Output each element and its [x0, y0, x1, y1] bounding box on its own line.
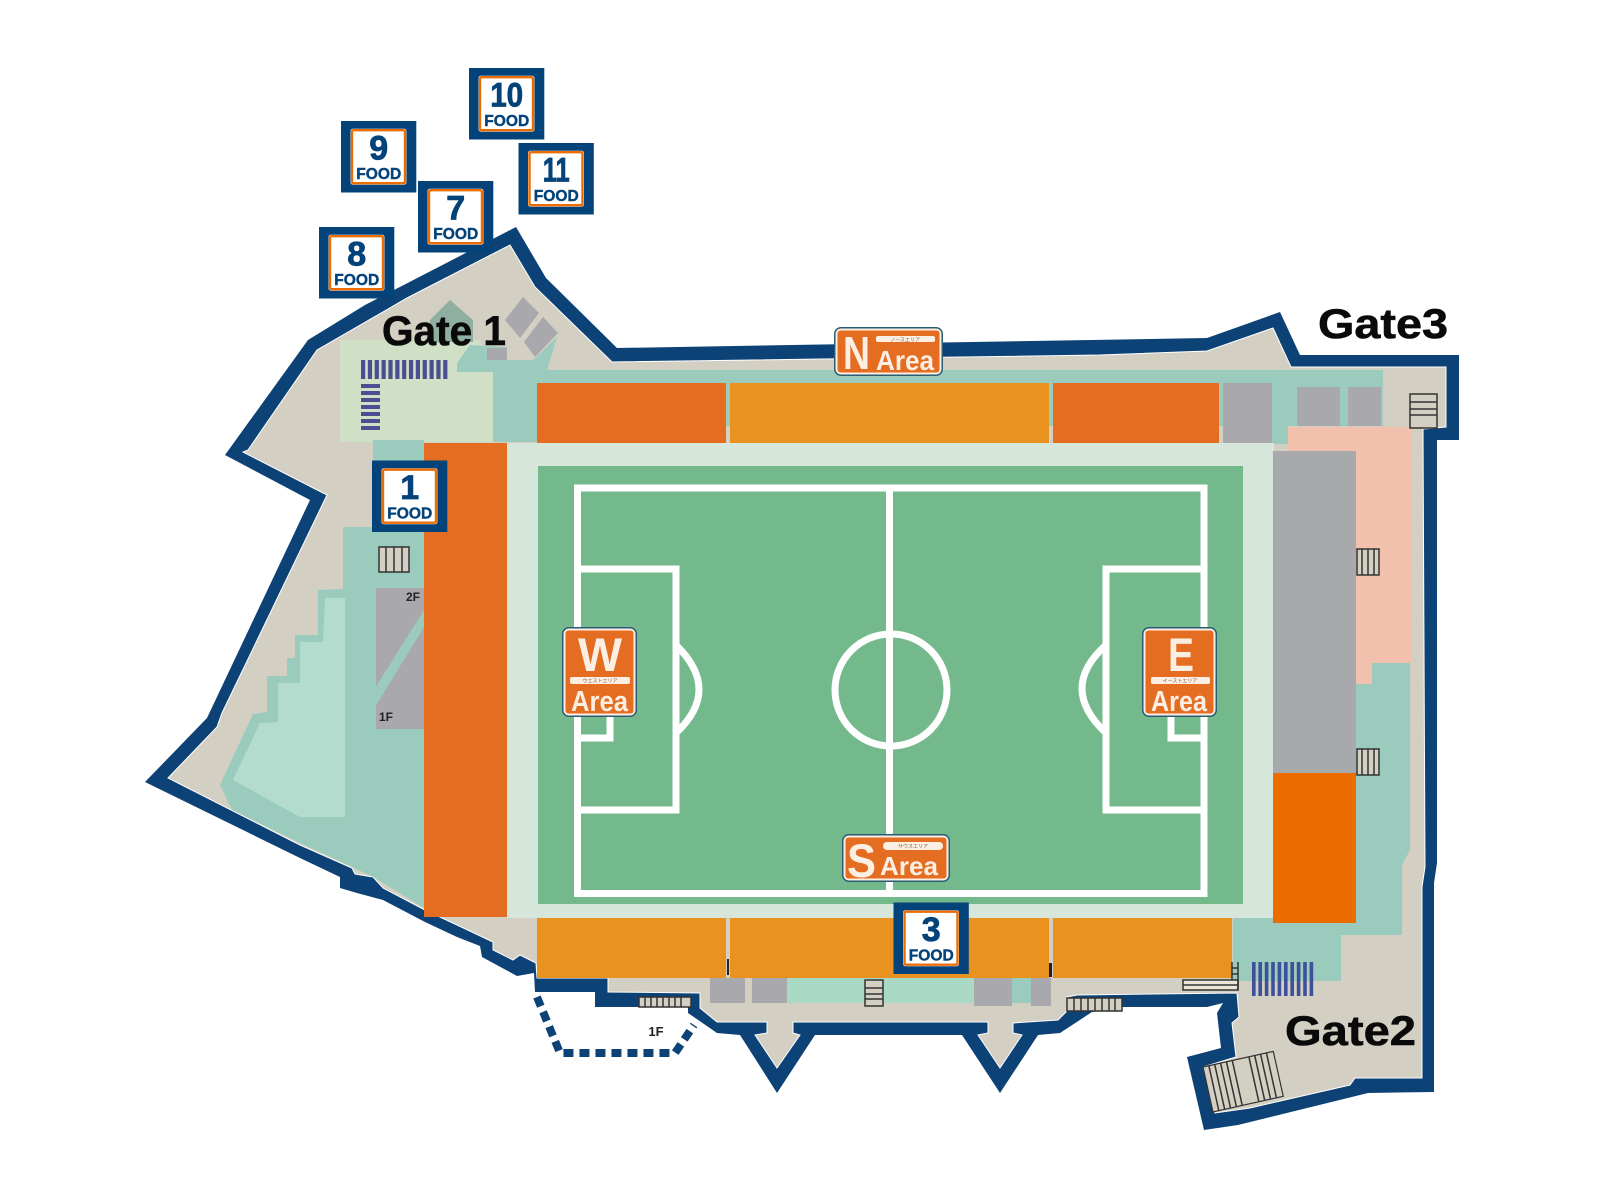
food marker 10: FOOD — [484, 113, 529, 130]
food marker 11: 11 — [543, 152, 570, 190]
stairs: gate 2 entrance — [1203, 1051, 1283, 1112]
pitch surround — [507, 443, 1274, 918]
badge: S Area — [842, 834, 950, 887]
food marker 11 — [518, 143, 594, 214]
east teal area — [1233, 663, 1410, 981]
gate 1 plaza — [340, 297, 558, 442]
stairs: east upper — [1357, 549, 1379, 575]
food marker 1: 1 — [400, 469, 419, 507]
badge: E Area: Area — [1151, 686, 1208, 718]
food marker 1: FOOD — [387, 506, 432, 522]
food marker 3: 3 — [922, 911, 941, 949]
stripes: gate 2 — [1252, 962, 1314, 996]
badge: S Area: サウスエリア — [898, 843, 928, 850]
ramp 2F to 1F: 2F — [406, 590, 420, 604]
food marker 10 — [469, 68, 544, 140]
food marker 10: 10 — [490, 76, 523, 114]
badge: E Area: イーストエリア — [1163, 678, 1197, 684]
badge: E Area: E — [1168, 628, 1194, 681]
stripes: gate 1 — [361, 370, 450, 431]
food marker 3: FOOD — [909, 948, 954, 964]
badge: N Area: ノースエリア — [890, 338, 920, 344]
dashed 1F outline — [537, 997, 694, 1053]
badge: S Area: S — [847, 834, 876, 887]
food marker 8 — [319, 227, 394, 298]
food marker 7 — [418, 181, 493, 252]
north stands — [537, 383, 1381, 443]
stairs: west — [379, 547, 409, 572]
food marker 3 — [894, 902, 969, 974]
stairs: gate 2 corner — [1183, 962, 1238, 990]
food marker 8: FOOD — [334, 272, 379, 289]
label: Gate 3: Gate3 — [1318, 300, 1448, 347]
concourse ground — [168, 245, 1446, 1113]
stairs: south centre — [865, 980, 883, 1006]
outer wall — [145, 227, 1459, 1130]
badge: W Area — [562, 627, 637, 718]
food marker 9 — [341, 121, 416, 192]
badge: N Area: Area — [876, 345, 934, 376]
food marker 11: FOOD — [534, 188, 579, 205]
badge: E Area — [1142, 627, 1217, 718]
badge: S Area: Area — [880, 851, 939, 881]
south stands — [537, 918, 1232, 978]
bottom service strip — [710, 978, 1051, 1006]
badge: W Area: ウエストエリア — [582, 678, 618, 684]
north teal strip — [535, 370, 1383, 444]
food marker 7: 7 — [446, 190, 465, 228]
badge: N Area — [834, 327, 943, 379]
food marker 8: 8 — [347, 236, 366, 274]
east stand — [1273, 451, 1356, 923]
ramp 2F to 1F: 1F — [379, 710, 393, 724]
stairs: north east — [1410, 394, 1437, 428]
pink area east — [1288, 427, 1412, 684]
badge: N Area: N — [843, 327, 870, 379]
food marker 1 — [372, 460, 447, 532]
stairs: south east — [1067, 998, 1122, 1011]
badge: W Area: W — [578, 628, 623, 681]
food marker 9: FOOD — [356, 166, 401, 183]
pitch — [538, 466, 1243, 904]
stairs: south west — [639, 997, 691, 1007]
label: Gate 1: Gate 1 — [382, 307, 506, 354]
label: Gate 2: Gate2 — [1285, 1007, 1416, 1054]
food marker 7: FOOD — [433, 226, 478, 243]
food marker 9: 9 — [369, 130, 388, 168]
stairs: east lower — [1357, 749, 1379, 775]
badge: W Area: Area — [571, 686, 629, 718]
west stand — [424, 443, 507, 917]
west side plaza — [220, 440, 424, 908]
label: 1F annex: 1F — [648, 1024, 664, 1039]
ramp 2F to 1F — [375, 588, 424, 729]
